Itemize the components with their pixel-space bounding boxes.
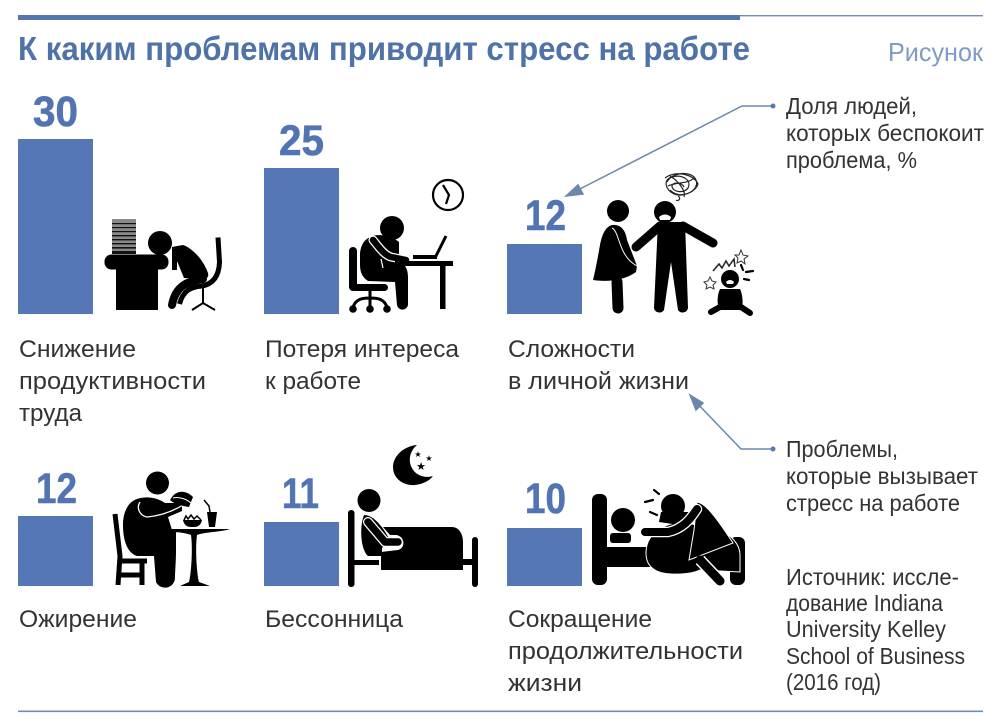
value 12: 12 — [36, 465, 77, 513]
source note — [786, 564, 965, 695]
source note: дование Indiana — [786, 590, 944, 616]
source note: University Kelley — [786, 616, 946, 642]
icon: person awake in bed under moon: ★ — [425, 454, 433, 463]
bar 12 — [507, 244, 582, 314]
callout: problems: стресс на работе — [786, 490, 960, 516]
source note: School of Business — [786, 643, 965, 669]
callout: share of people — [786, 93, 984, 173]
arrow: share of people callout to value — [566, 104, 776, 196]
value 10: 10 — [525, 475, 566, 523]
arrow: problems callout to label — [690, 395, 776, 452]
label: продолжительности — [508, 638, 743, 665]
bar 11 — [264, 522, 339, 586]
label — [19, 336, 206, 427]
callout: problems — [786, 436, 978, 516]
panel: personal life — [507, 173, 753, 395]
panel: loss of interest — [264, 117, 463, 395]
value 12: 12 — [525, 192, 566, 240]
label: труда — [19, 400, 83, 427]
bar 25 — [264, 168, 339, 314]
label: к работе — [265, 368, 361, 395]
label: Снижение — [19, 336, 136, 363]
value 25: 25 — [279, 117, 324, 165]
label: продуктивности — [19, 368, 206, 395]
callout: share of people: проблема, % — [786, 147, 917, 173]
icon: person awake in bed under moon: ★ — [414, 450, 422, 459]
panel: obesity — [18, 465, 230, 633]
source note: (2016 год) — [786, 669, 881, 695]
panel: productivity — [18, 88, 220, 427]
label — [508, 606, 743, 697]
callout: share of people: Доля людей, — [786, 93, 917, 119]
label: Потеря интереса — [265, 336, 460, 363]
value 30: 30 — [33, 88, 78, 136]
title: К каким проблемам приводит стресс на работе — [18, 30, 750, 67]
label — [508, 336, 689, 395]
source note: Источник: иссле- — [786, 564, 959, 590]
bar 30 — [18, 139, 93, 314]
panel: life expectancy — [507, 475, 745, 697]
label: Сокращение — [508, 606, 652, 633]
figure label: Рисунок — [888, 37, 984, 67]
bar 12 — [18, 516, 93, 586]
icon: person awake in bed under moon — [348, 445, 478, 587]
icon: person awake in bed under moon: ★ — [416, 461, 426, 473]
label: в личной жизни — [508, 368, 689, 395]
callout: problems: которые вызывает — [786, 463, 978, 489]
value 11: 11 — [282, 470, 319, 518]
icon: quarrelling family — [593, 173, 753, 313]
icon: person grieving at bedside — [592, 490, 745, 585]
label: Ожирение — [19, 606, 137, 633]
callout: share of people: которых беспокоит — [786, 120, 984, 146]
label: Бессонница — [265, 606, 404, 633]
icon: person at laptop with clock — [349, 180, 463, 313]
label: жизни — [508, 670, 582, 697]
label: Сложности — [508, 336, 635, 363]
panel: insomnia — [264, 445, 478, 633]
bar 10 — [507, 528, 582, 586]
icon: person slumped over desk — [104, 219, 220, 310]
label — [265, 336, 460, 395]
callout: problems: Проблемы, — [786, 436, 898, 462]
icon: person eating at table — [115, 472, 230, 588]
